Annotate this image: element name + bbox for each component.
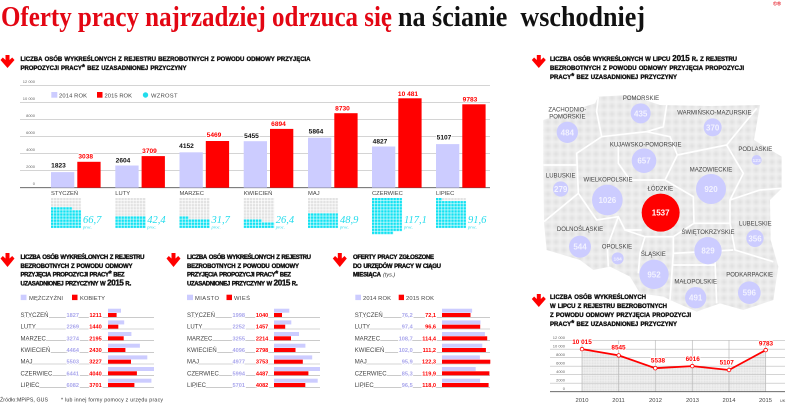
heading: men and women <box>20 252 144 288</box>
table rows: 118,0 <box>422 383 436 389</box>
icon: red down arrow <box>0 253 14 267</box>
bubble values: 657 <box>637 157 651 166</box>
month labels: STYCZEŃ <box>51 190 78 197</box>
icon: red down arrow <box>333 253 347 267</box>
table rows <box>187 309 320 389</box>
bubble values: 544 <box>573 243 587 252</box>
waffle: lipiec <box>436 198 487 230</box>
month labels: LUTY <box>115 191 130 197</box>
region names: MAZOWIECKIE <box>690 168 732 174</box>
table rows: 2798 <box>256 348 268 354</box>
region names: OPOLSKIE <box>602 245 632 251</box>
waffle: kwiecień <box>244 198 295 230</box>
bars: 1823 <box>51 162 66 170</box>
bubbles <box>553 103 764 308</box>
table rows: 2214 <box>256 336 269 342</box>
waffle: styczeń: 66,7 <box>83 215 102 226</box>
table rows: 4082 <box>256 383 268 389</box>
icon: red down arrow <box>0 55 14 68</box>
heading: map: bezrobotnych z powodu odmowy przyjęcia propozycji <box>550 63 744 72</box>
bars: 2604 <box>116 158 131 164</box>
table rows: LIPIEC <box>355 383 374 389</box>
bars: 9783 <box>463 96 478 104</box>
source note: * lub innej formy pomocy z urzędu pracy <box>61 398 163 404</box>
table rows: 6441 <box>67 371 79 377</box>
table rows: 4487 <box>256 371 268 377</box>
table rows: 3701 <box>89 383 102 389</box>
region names: PODKARPACKIE <box>726 272 773 278</box>
bubble values: 920 <box>704 185 718 194</box>
table rows: 3753 <box>256 360 268 366</box>
bars <box>51 91 486 188</box>
icon: red down arrow <box>166 253 180 267</box>
bubble values: 370 <box>706 123 720 132</box>
table rows: 5701 <box>233 383 245 389</box>
table rows: 1998 <box>233 313 245 319</box>
waffle: czerwiec: proc. <box>403 224 413 230</box>
heading: city and village: liczba osób wykreślonych z rejestru <box>187 252 311 261</box>
waffle: marzec: proc. <box>210 224 221 230</box>
region names: POMORSKIE <box>623 96 659 102</box>
title: na ścianie wschodniej <box>398 2 645 33</box>
line chart: 2010 <box>576 398 588 404</box>
icon: red down arrow <box>532 294 546 307</box>
bubble values: 435 <box>634 109 648 118</box>
legend: MĘŻCZYŹNI <box>29 295 63 302</box>
bars: 5469 <box>207 132 222 139</box>
heading: job offers: do urzędów pracy w ciągu <box>353 261 441 270</box>
waffle: luty <box>115 198 166 230</box>
map shape <box>543 95 782 312</box>
waffle: kwiecień: 26,4 <box>276 215 295 226</box>
line chart: 2000 <box>556 378 566 382</box>
copyright mark: ©® <box>773 0 781 8</box>
region names: ŚLĄSKIE <box>641 250 666 258</box>
table rows: LUTY <box>20 325 36 331</box>
source note: Źródło:MPiPS, GUS <box>0 396 49 404</box>
region names: LUBELSKIE <box>739 221 772 227</box>
bubble values: 123 <box>753 158 761 164</box>
waffle: maj: proc. <box>339 224 349 230</box>
waffle: marzec <box>180 198 231 230</box>
heading: map <box>550 54 744 81</box>
table rows: 119,9 <box>422 371 436 377</box>
table rows: 1827 <box>67 313 79 319</box>
waffle: marzec: 31,7 <box>210 215 231 226</box>
region names: KUJAWSKO-POMORSKIE <box>610 142 681 148</box>
table rows: LUTY <box>355 325 370 331</box>
table rows: KWIECIEŃ <box>355 347 384 354</box>
table rows: 122,3 <box>422 360 436 366</box>
heading: city and village: uzasadnionej przyczyny w 2015 r. <box>187 279 298 288</box>
line chart: 4000 <box>556 369 566 374</box>
table rows: 95,9 <box>402 360 413 366</box>
table rows: 4977 <box>233 360 245 366</box>
waffle: luty: 42,4 <box>147 215 166 226</box>
line chart: 10 000 <box>553 344 566 348</box>
month labels: MARZEC <box>180 191 204 197</box>
table rows: CZERWIEC <box>355 371 387 377</box>
table rows: STYCZEŃ <box>355 312 383 319</box>
bars: 4827 <box>373 138 388 146</box>
heading: job offers: oferty pracy zgłoszone <box>353 252 434 261</box>
icon: red down arrow <box>532 55 546 68</box>
bars: 5455 <box>244 133 259 140</box>
legend: 2015 ROK <box>104 94 132 100</box>
legend <box>355 295 434 302</box>
waffle: kwiecień: proc. <box>275 224 285 230</box>
waffle: styczeń <box>51 198 102 230</box>
legend: WZROST <box>151 94 178 100</box>
line chart: 6000 <box>556 360 566 366</box>
line chart: UK <box>780 399 786 403</box>
line chart: 2011 <box>612 398 625 404</box>
table rows: LUTY <box>187 325 202 331</box>
bubble values: 1026 <box>598 196 617 205</box>
line chart: 9783 <box>759 340 774 348</box>
table rows: 1440 <box>89 325 102 331</box>
region names <box>546 96 773 285</box>
line chart: 2015 <box>759 398 772 404</box>
line chart: 2013 <box>686 398 699 404</box>
bars: 3038 <box>78 154 93 160</box>
table rows: 3255 <box>233 336 245 342</box>
table rows: MAJ <box>187 360 199 366</box>
panel: voivodeship map <box>532 54 782 312</box>
heading: monthly chart: propozycji pracy* bez uzasadnionej przyczyny <box>20 63 186 72</box>
bars: 5107 <box>437 134 452 142</box>
heading: city and village: przyjęcia propozycji pracy* bez <box>187 270 291 279</box>
legend <box>187 294 250 302</box>
table rows: MAJ <box>355 360 367 366</box>
table rows: 102,0 <box>399 348 413 354</box>
table rows: 6082 <box>67 383 79 389</box>
region names: ŁÓDZKIE <box>648 186 673 193</box>
bubble values: 491 <box>689 294 703 303</box>
line chart: 2012 <box>649 398 662 404</box>
table rows: 1040 <box>256 313 268 319</box>
table rows: 3274 <box>67 336 80 342</box>
panel: monthly bar chart <box>0 54 490 235</box>
line chart <box>550 335 786 404</box>
table rows: 96,6 <box>425 325 436 331</box>
table rows: 108,7 <box>399 336 413 342</box>
region names: ZACHODNIO- <box>548 107 586 113</box>
line chart: 10 015 <box>572 339 592 346</box>
region names: POMORSKIE <box>549 115 585 121</box>
panel: men and women table <box>0 252 154 389</box>
waffle: czerwiec <box>372 198 427 235</box>
line chart: 8000 <box>556 352 566 357</box>
title: Oferty pracy najrzadziej odrzuca się <box>1 2 392 33</box>
legend: 2014 ROK <box>59 94 87 100</box>
bubble values: 279 <box>554 185 568 194</box>
heading: job offers: miesiąca <box>353 270 382 279</box>
legend <box>21 295 105 302</box>
heading: city and village: bezrobotnych z powodu odmowy <box>187 261 299 270</box>
table rows: LIPIEC <box>20 383 40 389</box>
month labels <box>51 190 454 197</box>
bubble values: 829 <box>701 247 715 256</box>
table rows: 85,3 <box>402 371 413 377</box>
region names: PODLASKIE <box>738 147 772 153</box>
table rows: STYCZEŃ <box>20 312 49 319</box>
table rows: CZERWIEC <box>20 371 53 377</box>
month labels: LIPIEC <box>436 191 454 197</box>
line chart: 5538 <box>651 358 666 364</box>
table rows: 72,1 <box>425 313 436 319</box>
waffle: maj <box>308 198 359 230</box>
waffle: maj: 48,9 <box>340 215 359 226</box>
bubble values <box>554 109 762 303</box>
region names: DOLNOŚLĄSKIE <box>557 225 603 233</box>
table rows: 4040 <box>89 371 102 377</box>
table rows <box>355 309 490 389</box>
table rows: 1211 <box>90 313 102 319</box>
waffle: lipiec: proc. <box>467 224 477 230</box>
table rows: 4096 <box>233 348 245 354</box>
region names: MAŁOPOLSKIE <box>674 279 717 285</box>
panel: July line chart <box>532 292 786 404</box>
waffle: luty: proc. <box>146 224 157 230</box>
bars: 10 481 <box>398 91 418 98</box>
axis and gridlines <box>20 79 490 188</box>
axis and gridlines: 12 000 <box>23 79 36 84</box>
table rows: 111,2 <box>423 348 436 354</box>
month labels: KWIECIEŃ <box>244 190 272 197</box>
table rows: STYCZEŃ <box>187 312 215 319</box>
axis and gridlines: 4000 <box>26 147 36 152</box>
table rows: 1457 <box>256 325 268 331</box>
region names: WARMIŃSKO-MAZURSKIE <box>677 109 751 116</box>
table rows: MARZEC <box>355 336 381 342</box>
region names: ŚWIĘTOKRZYSKIE <box>681 228 735 236</box>
bubble values: 484 <box>561 128 575 137</box>
table rows: 96,5 <box>402 383 413 389</box>
line chart: 0 <box>563 386 566 391</box>
heading: line chart: liczba osób wykreślonych <box>550 292 646 301</box>
table rows: 2195 <box>89 336 102 342</box>
table rows: 5503 <box>67 360 79 366</box>
bubble values: 356 <box>748 234 762 243</box>
map of Poland <box>543 95 782 312</box>
bars: 8730 <box>335 106 350 112</box>
legend: KOBIETY <box>80 296 105 302</box>
table rows: 2252 <box>233 325 245 331</box>
heading: men and women: liczba osób wykreślonych z rejestru <box>20 252 144 261</box>
legend: 2015 ROK <box>406 296 434 302</box>
table rows: 2269 <box>67 325 79 331</box>
waffle: czerwiec: 117,1 <box>404 215 427 226</box>
line chart: 8545 <box>611 344 626 352</box>
table rows: LIPIEC <box>187 383 207 389</box>
heading: city and village <box>187 252 311 288</box>
axis and gridlines: 2000 <box>26 164 36 169</box>
axis and gridlines: 0 <box>33 181 36 186</box>
waffle: styczeń: proc. <box>82 224 92 230</box>
line chart: 12 000 <box>553 335 566 340</box>
table rows: MARZEC <box>187 336 213 342</box>
month labels: CZERWIEC <box>372 191 403 197</box>
region borders <box>543 97 782 303</box>
heading: men and women: przyjęcia propozycji pracy* bez <box>20 270 125 279</box>
heading: men and women: bezrobotnych z powodu odmowy <box>20 261 132 270</box>
table rows: 4464 <box>67 348 80 354</box>
table rows: 3227 <box>89 360 102 366</box>
heading: map: pracy* bez uzasadnionej przyczyny <box>550 72 677 81</box>
region names: WIELKOPOLSKIE <box>584 178 632 184</box>
heading: line chart <box>550 292 691 328</box>
table rows: 2430 <box>89 348 102 354</box>
month labels: MAJ <box>308 191 320 197</box>
bubble values: 1537 <box>652 209 670 218</box>
title <box>1 2 645 33</box>
heading: men and women: uzasadnionej przyczyny w 2015 r. <box>20 279 132 288</box>
heading: line chart: z powodu odmowy przyjęcia propozycji <box>550 310 691 319</box>
panel: job offers table <box>333 252 490 389</box>
bubble values: 596 <box>743 289 757 298</box>
heading: line chart: pracy* bez uzasadnionej przyczyny <box>550 319 677 328</box>
panel: city and village table <box>166 252 320 389</box>
table rows: 5994 <box>233 371 246 377</box>
table rows: KWIECIEŃ <box>187 347 217 354</box>
table rows: KWIECIEŃ <box>20 347 50 354</box>
heading: monthly chart: liczba osób wykreślonych z rejestru bezrobotnych z powodu odmowy przyjęcia <box>20 54 311 63</box>
heading: map: liczba osób wykreślonych w lipcu 2015 r. z rejestru <box>550 54 737 63</box>
table rows: 76,2 <box>402 313 413 319</box>
table rows: MAJ <box>20 360 32 366</box>
heading: job offers: (tys.) <box>383 273 395 279</box>
legend: WIEŚ <box>234 294 250 302</box>
bubble values: 184 <box>614 256 622 262</box>
region names: LUBUSKIE <box>546 173 575 179</box>
source note <box>0 396 163 404</box>
axis and gridlines: 6000 <box>26 130 36 135</box>
heading: line chart: w lipcu z rejestru bezrobotnych <box>550 301 667 310</box>
table rows: MARZEC <box>20 336 46 342</box>
bars: 6894 <box>271 121 286 128</box>
waffle: lipiec: 91,6 <box>468 215 487 226</box>
heading: job offers <box>353 252 441 279</box>
table rows: CZERWIEC <box>187 371 220 377</box>
legend <box>51 92 178 100</box>
table rows <box>20 309 154 389</box>
bars: 4152 <box>179 143 194 150</box>
bars: 5864 <box>309 128 324 136</box>
legend: MIASTO <box>195 296 219 302</box>
axis and gridlines: 8000 <box>26 113 36 118</box>
line chart: 6016 <box>686 356 700 363</box>
bars: 3709 <box>142 148 157 155</box>
axis and gridlines: 10 000 <box>23 96 36 101</box>
line chart: 5107 <box>720 360 734 366</box>
line chart: 2014 <box>723 398 736 404</box>
bubble values: 952 <box>647 270 661 279</box>
table rows: 97,4 <box>402 325 414 331</box>
legend: 2014 ROK <box>363 296 391 302</box>
table rows: 114,4 <box>422 336 437 342</box>
heading: monthly chart <box>20 54 311 72</box>
